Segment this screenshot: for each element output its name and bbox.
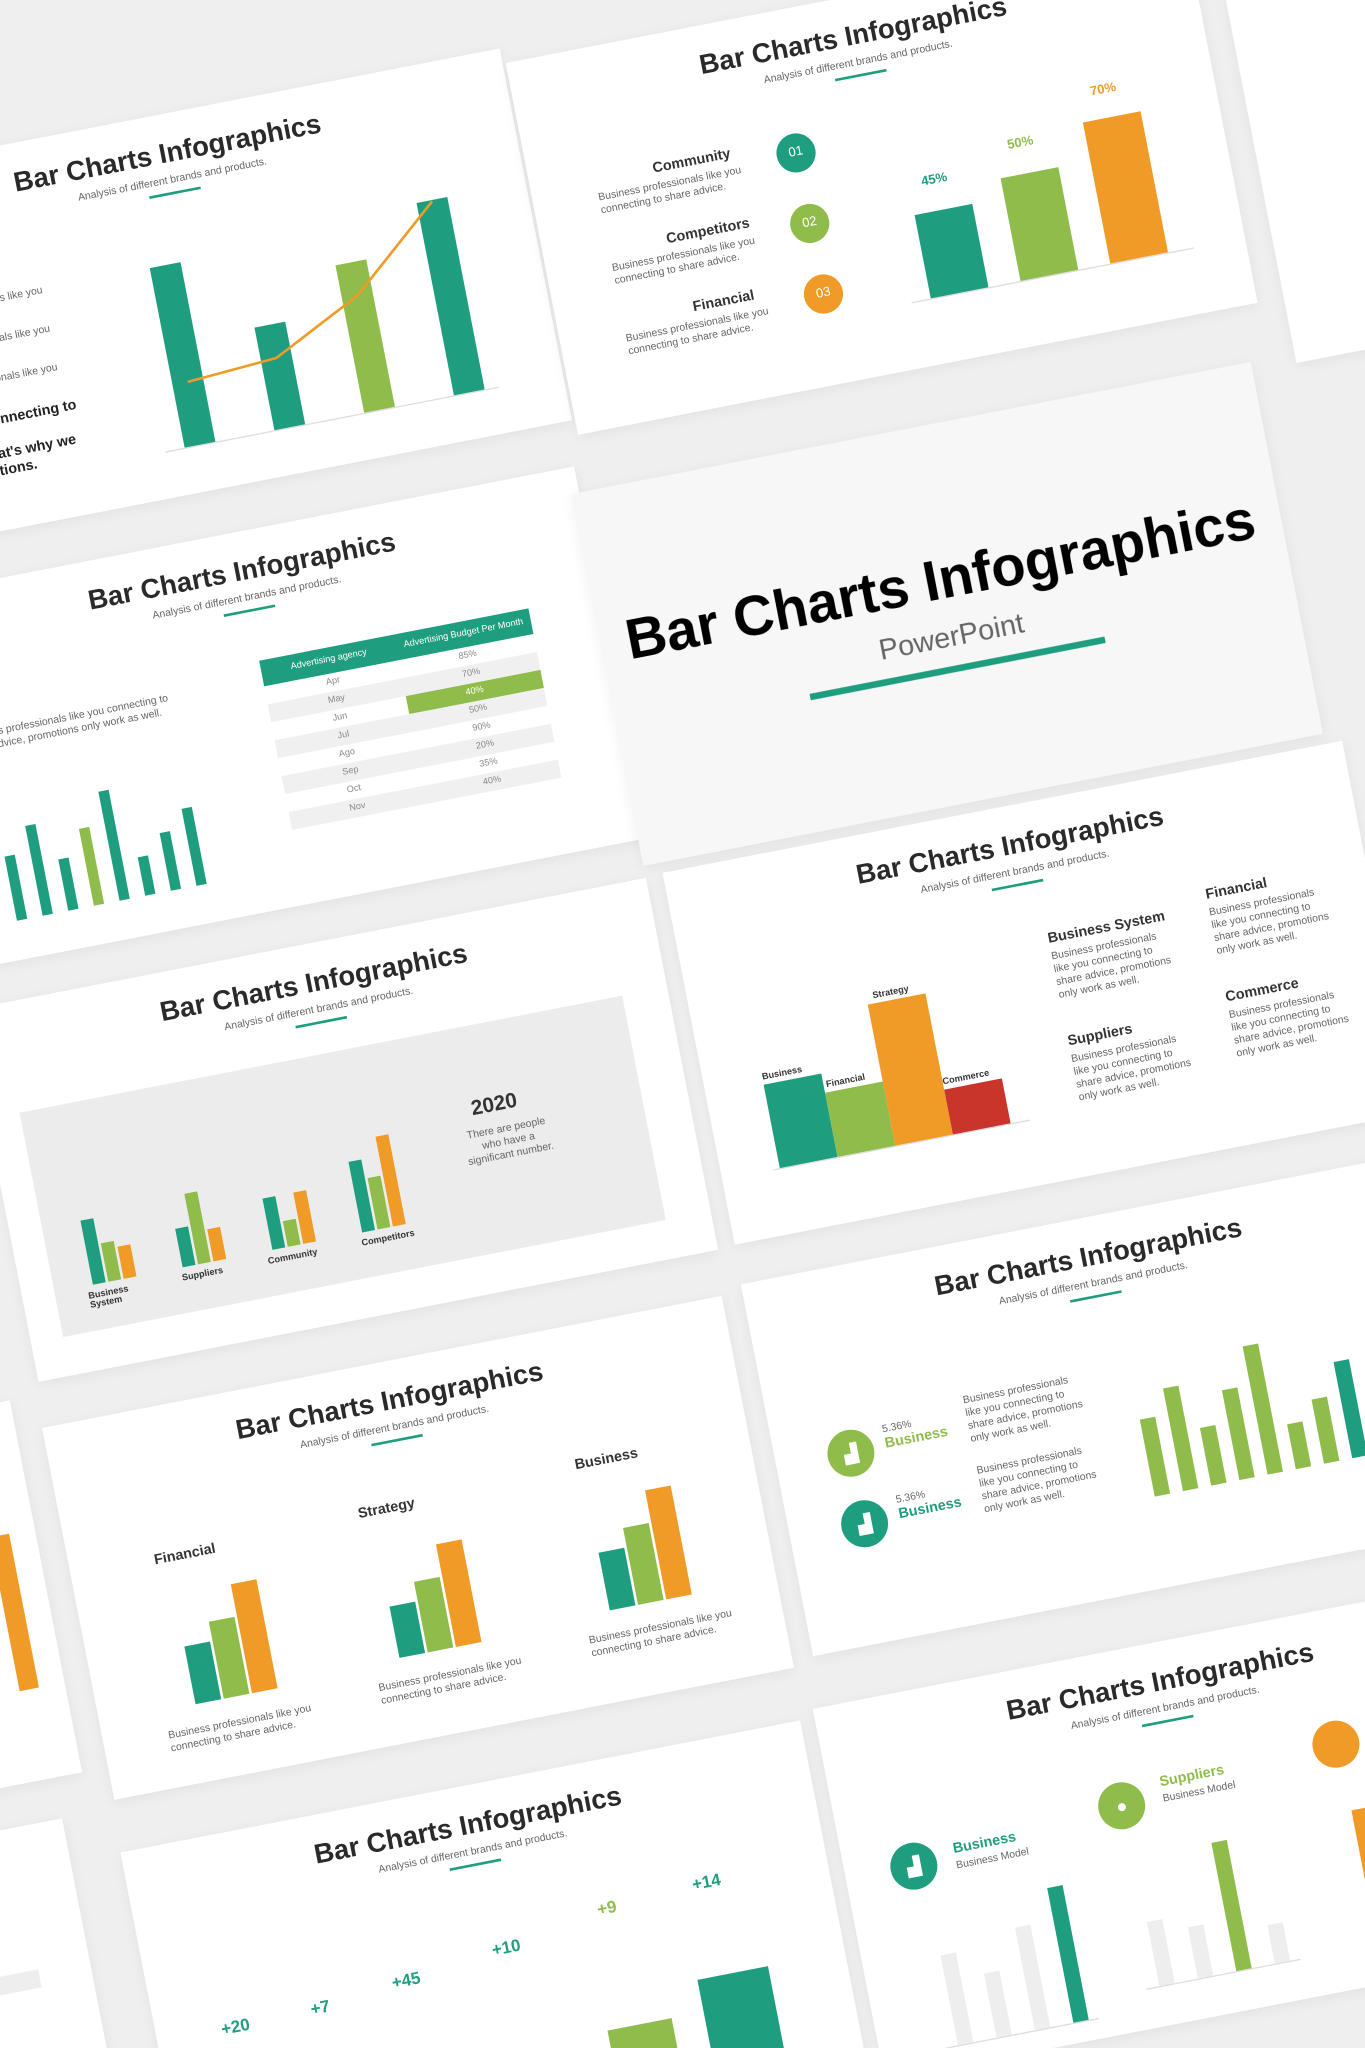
legend: Commerce [1224, 976, 1300, 1005]
subheading: PowerPoint [876, 606, 1027, 666]
slide: partial top right [1224, 0, 1365, 363]
slide: line and bar chart: Analysis of different brands and products. [77, 155, 268, 203]
grey panel with grouped bars: who have a [481, 1130, 536, 1152]
legend: like you connecting to [1230, 1003, 1331, 1033]
table: 50% [468, 703, 488, 716]
slide: 5.36% business [741, 1152, 1365, 1656]
legend: Business System [1046, 909, 1166, 947]
slide: bottom right icons: Business [952, 1829, 1017, 1857]
slide: 5.36% business: Business professionals [962, 1374, 1069, 1406]
slide: business system [663, 741, 1365, 1245]
slide: community competitors financial: Analysis of different brands and products. [763, 38, 954, 86]
legend: like you connecting to [1210, 900, 1311, 931]
mini charts [918, 1878, 1099, 2048]
list with numbered circles: Business professionals like you [611, 234, 756, 274]
slide: 5.36% business: only work as well. [983, 1488, 1066, 1515]
legend: Business professionals [1228, 989, 1335, 1021]
grey panel with grouped bars: Community [267, 1248, 318, 1267]
list with numbered circles: connecting to share advice. [627, 321, 754, 357]
slide: grouped bars 2020: Analysis of different brands and products. [223, 985, 414, 1033]
legend: only work as well. [1078, 1076, 1160, 1103]
table: 85% [458, 649, 478, 662]
slide: financial strategy business: connecting to share advice. [170, 1718, 297, 1754]
slide: 5.36% business: like you connecting to [964, 1388, 1065, 1419]
list with numbered circles: 02 [801, 214, 818, 231]
grey panel with grouped bars: significant number. [467, 1140, 555, 1168]
three mini charts: Financial [153, 1541, 217, 1568]
slide: financial strategy business: Business [573, 1446, 639, 1473]
bar chart [126, 183, 499, 453]
table: 40% [482, 775, 502, 787]
list with numbered circles: Competitors [665, 216, 751, 247]
list with numbered circles: Community [651, 146, 732, 177]
legend: Suppliers [1066, 1021, 1134, 1049]
table: Nov [349, 801, 366, 813]
partial left slides [0, 1400, 82, 1904]
legend: like you connecting to [1073, 1047, 1174, 1077]
slide: table and bars [0, 466, 646, 970]
list with numbered circles: Business professionals like you [625, 305, 770, 344]
slide: line and bar chart [0, 48, 572, 552]
table: Ago [338, 747, 356, 759]
value labels: +10 [490, 1935, 522, 1960]
table: Jun [332, 712, 348, 723]
icons [886, 1839, 941, 1894]
slide: 5.36% business: Bar Charts Infographics [932, 1213, 1245, 1302]
slide: financial strategy business: Business professionals like you [167, 1702, 312, 1741]
slide: 5.36% business: share advice, promotions [981, 1468, 1097, 1502]
legend: Business professionals [1070, 1033, 1177, 1065]
table: 90% [472, 721, 492, 733]
slide: bottom right icons: Suppliers [1158, 1762, 1225, 1790]
legend: share advice, promotions [1213, 910, 1330, 944]
bar chart [1140, 1344, 1365, 1497]
main heading: Bar Charts Infographics [621, 489, 1261, 672]
grey panel with grouped bars [20, 996, 666, 1337]
icon stats: ▟ [842, 1442, 860, 1465]
text block [0, 284, 78, 492]
legend: share advice, promotions [1055, 954, 1172, 988]
slide: table and bars: Bar Charts Infographics [86, 527, 398, 616]
icons: ▟ [905, 1855, 923, 1878]
table: Apr [325, 676, 341, 687]
slide: grouped bars 2020: Bar Charts Infographics [157, 939, 470, 1028]
list with numbered circles: 03 [815, 285, 832, 302]
table: 35% [479, 757, 499, 769]
slide: bottom right icons: Business Model [955, 1845, 1030, 1871]
value labels: +7 [309, 1996, 331, 2019]
slide: 5.36% business: like you connecting to [978, 1459, 1079, 1489]
slide: financial strategy business: Business professionals like you [588, 1607, 733, 1646]
slide: bottom right icons: ● [1114, 1794, 1129, 1817]
stacked bar chart: Business [761, 1065, 803, 1082]
table: Advertising agency [290, 648, 368, 672]
slide: bottom left plus labels: Bar Charts Infographics [312, 1781, 624, 1870]
list with numbered circles [597, 133, 844, 357]
stacked bar chart: Strategy [872, 985, 910, 1001]
legend: Financial [1204, 875, 1268, 903]
stacked bar chart: Financial [825, 1073, 866, 1090]
list with numbered circles: Business professionals like you [597, 164, 742, 203]
slide: bottom right icons: Analysis of different brands and products. [1070, 1683, 1261, 1732]
legend: Business professionals [1208, 886, 1315, 918]
bar chart months [4, 790, 207, 921]
slide: business system: Analysis of different brands and products. [919, 847, 1110, 896]
legend: only work as well. [1215, 929, 1298, 957]
table: May [327, 693, 346, 706]
slide: 5.36% business: 5.36% [881, 1418, 912, 1435]
legend [1046, 875, 1350, 1103]
slide: 5.36% business: Business [897, 1495, 963, 1522]
slide: financial strategy business: Analysis of different brands and products. [299, 1403, 490, 1451]
slide: grouped bars 2020 [0, 878, 718, 1382]
slide: financial strategy business: Strategy [357, 1496, 416, 1522]
value labels: +14 [690, 1869, 722, 1894]
grey panel with grouped bars: Competitors [361, 1229, 415, 1248]
slide: bottom left plus labels [120, 1720, 872, 2048]
slide: 5.36% business: Business professionals [976, 1445, 1083, 1476]
legend: share advice, promotions [1075, 1056, 1192, 1090]
bar chart percentages: 50% [1006, 134, 1035, 153]
slide: 5.36% business: only work as well. [969, 1417, 1052, 1444]
slide: financial strategy business: Business professionals like you [378, 1654, 522, 1694]
table: Oct [346, 783, 362, 795]
slide: 5.36% business: Business [884, 1424, 949, 1452]
slide: 5.36% business: share advice, promotions [967, 1398, 1084, 1432]
value labels: +45 [390, 1968, 422, 1992]
table: Advertising Budget Per Month [403, 618, 524, 650]
slide: financial strategy business: Bar Charts Infographics [233, 1356, 546, 1446]
legend: like you connecting to [1053, 944, 1154, 975]
table: Jul [337, 730, 350, 741]
slide: main title [571, 362, 1323, 866]
slide: line and bar chart: Bar Charts Infographics [11, 109, 324, 198]
bar chart percentages: 70% [1089, 80, 1117, 99]
value labels: +20 [219, 2014, 251, 2039]
icon stats [823, 1426, 878, 1481]
value labels [219, 1869, 722, 2039]
list with numbered circles: Financial [691, 288, 756, 315]
legend: only work as well. [1235, 1032, 1318, 1059]
legend: only work as well. [1058, 973, 1140, 1001]
grey panel with grouped bars: System [89, 1295, 123, 1310]
grey panel with grouped bars: There are people [466, 1115, 546, 1141]
slide: financial strategy business: connecting to share advice. [380, 1671, 507, 1707]
table: 40% [465, 685, 485, 698]
bar chart percentages [874, 56, 1194, 303]
grey panel with grouped bars: Suppliers [181, 1266, 224, 1283]
slide: table and bars: Analysis of different brands and products. [151, 573, 342, 621]
slide: 5.36% business: ▟ [856, 1512, 874, 1535]
slide: bottom right icons: Bar Charts Infographics [1004, 1637, 1316, 1726]
stacked bar chart [741, 954, 1030, 1171]
table: Sep [342, 765, 359, 777]
slide: financial strategy business [42, 1296, 794, 1800]
slide: business system: Bar Charts Infographics [854, 801, 1166, 890]
list with numbered circles: 01 [787, 144, 804, 161]
bar chart percentages: 45% [920, 170, 949, 189]
year callout: 2020 [469, 1090, 519, 1120]
slide: bottom left plus labels: Analysis of different brands and products. [377, 1827, 568, 1875]
list with numbered circles: connecting to share advice. [613, 251, 741, 286]
list with numbered circles: connecting to share advice. [600, 180, 727, 216]
slide: 5.36% business: 5.36% [895, 1488, 926, 1505]
slide: bottom right icons: Business Model [1162, 1779, 1236, 1804]
legend: Business professionals [1050, 930, 1157, 962]
table: 20% [475, 739, 495, 751]
grey panel with grouped bars: Business [88, 1285, 129, 1301]
slide: community competitors financial [506, 0, 1258, 435]
table [259, 608, 561, 830]
table: 70% [461, 667, 481, 680]
slide: financial strategy business: connecting to share advice. [590, 1623, 718, 1659]
slide: 5.36% business: Analysis of different brands and products. [998, 1259, 1189, 1307]
legend: share advice, promotions [1233, 1012, 1350, 1046]
value labels: +9 [595, 1896, 618, 1919]
stacked bar chart: Commerce [942, 1069, 990, 1087]
slide: bottom right icons [813, 1577, 1365, 2048]
rising bars [608, 1966, 784, 2048]
